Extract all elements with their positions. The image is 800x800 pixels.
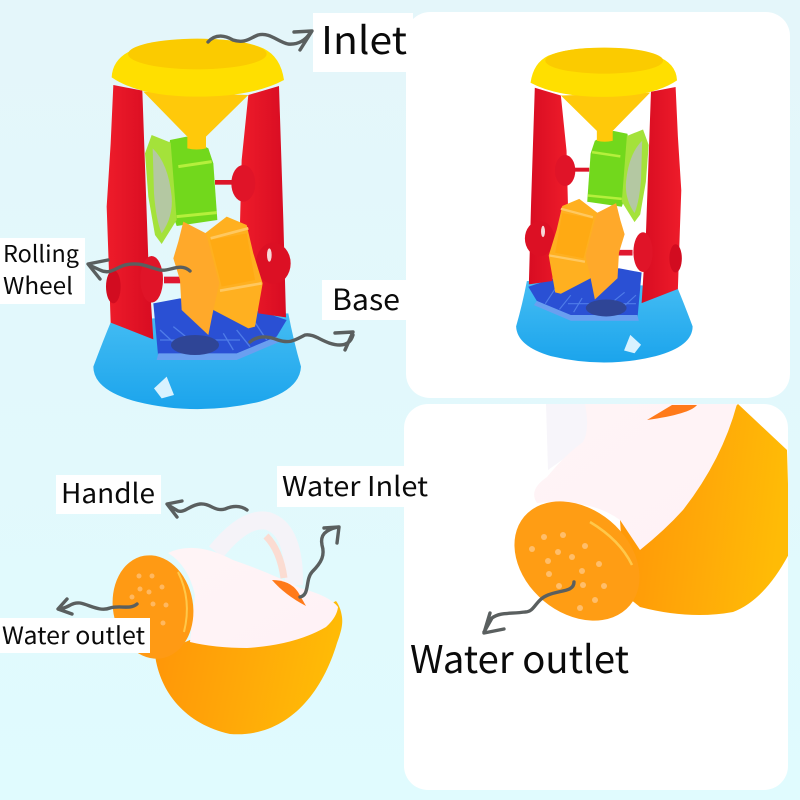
closeup bowl: [620, 404, 790, 615]
can lid: [168, 548, 338, 648]
highlights: [154, 377, 174, 398]
arrow: water inlet: [300, 527, 339, 597]
panel: watering can closeup: [404, 404, 788, 790]
left red leg: [107, 85, 153, 339]
spout disc: [105, 549, 201, 665]
right red leg: [240, 86, 286, 317]
closeup spout highlight: [590, 522, 632, 565]
illustration: watering can closeup: [514, 404, 788, 621]
green wheel: [145, 135, 217, 244]
right upper hub: [231, 165, 255, 202]
can handle: [216, 520, 294, 585]
closeup inlet: [647, 405, 697, 420]
spout holes: [130, 574, 168, 626]
inner bowl: [128, 39, 267, 69]
blue platform: [153, 298, 287, 360]
rim: [112, 39, 284, 97]
arrow: water outlet closeup: [484, 582, 574, 633]
left leg hole: [106, 270, 121, 303]
closeup spout holes: [529, 532, 607, 611]
handle inner shade: [266, 536, 284, 578]
label: Inlet: Inlet: [321, 10, 407, 65]
label: Base: Base: [332, 277, 400, 319]
red axle green: [215, 180, 233, 185]
label: Handle: Handle: [61, 472, 155, 511]
illustration: water wheel toy mirrored closeup: [516, 48, 693, 362]
label: Rolling Wheel: Wheel: [3, 267, 73, 301]
panel: water wheel closeup: [406, 12, 790, 398]
arrow: water outlet: [58, 599, 137, 614]
right lower spoked hub: [256, 243, 291, 284]
toy base: [93, 313, 301, 409]
orange wheel: [173, 217, 263, 335]
illustration: water wheel toy: [93, 39, 301, 409]
water inlet hole: [272, 580, 306, 606]
illustration: watering can: [105, 520, 342, 734]
closeup lid: [534, 404, 737, 550]
left hub: [140, 256, 163, 303]
red axle orange: [164, 277, 189, 283]
label: Rolling Wheel: Rolling: [3, 235, 79, 269]
spout highlight: [178, 572, 187, 632]
arrow: handle: [167, 501, 247, 517]
closeup spout disc: [514, 501, 640, 621]
funnel: [143, 92, 248, 149]
arrow: rolling wheel: [88, 260, 190, 279]
arrow: inlet: [208, 31, 312, 50]
can bowl: [155, 601, 342, 734]
arrow: base: [250, 332, 353, 350]
label: Water outlet small: Water outlet: [2, 616, 145, 651]
label: Rolling Wheel: [0, 235, 85, 304]
closeup handle: [546, 404, 590, 470]
label: Water outlet large: Water outlet: [410, 629, 629, 684]
label: Water Inlet: Water Inlet: [282, 465, 428, 504]
